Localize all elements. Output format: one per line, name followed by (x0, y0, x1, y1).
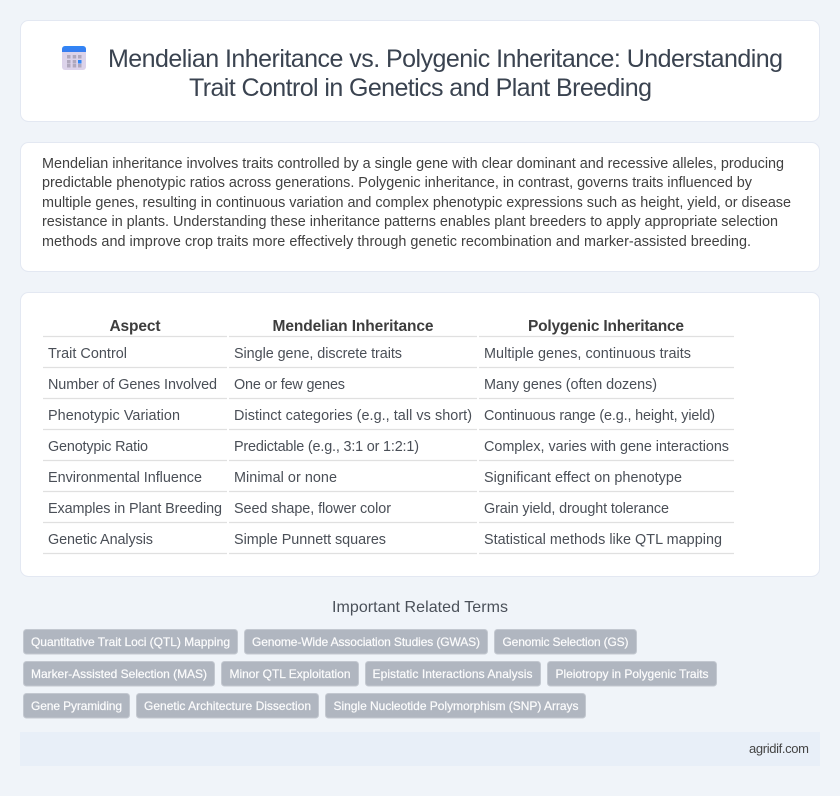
panel: introduction (20, 142, 820, 272)
tag: epistatic (366, 662, 540, 686)
title: Mendelian Inheritance vs. Polygenic Inheritance: Understanding (108, 45, 783, 73)
text block: introduction paragraph: methods and improve crop traits more effectively through genetic recombination and marker-assisted breeding. (42, 234, 751, 250)
table row: genotypic ratio: Genotypic Ratio (48, 439, 148, 455)
footer (20, 732, 820, 766)
table row: examples in plant breeding: Grain yield, drought tolerance (484, 501, 669, 517)
table row: genetic analysis: Genetic Analysis (48, 532, 153, 548)
table header row (110, 318, 684, 335)
table row: examples in plant breeding (48, 501, 669, 517)
table row: number of genes: Number of Genes Involved (48, 377, 217, 393)
tag: genetic architecture: Genetic Architecture Dissection (144, 699, 311, 713)
tag: SNP arrays (326, 694, 586, 718)
panel: comparison table (20, 292, 820, 576)
text block: introduction paragraph: predictable phenotypic ratios across generations. Polygenic inheritance, in contrast, governs traits influenced by (42, 175, 753, 191)
tag: genomic selection (494, 630, 636, 654)
table row: number of genes: Many genes (often dozens) (484, 377, 657, 393)
footer: agridif.com (749, 741, 809, 756)
table header row: Aspect (110, 318, 160, 335)
tag: pleiotropy: Pleiotropy in Polygenic Traits (556, 667, 708, 681)
table row: trait control: Single gene, discrete traits (234, 346, 402, 362)
icon: calendar grid (62, 46, 86, 70)
table header row: Polygenic Inheritance (528, 318, 684, 335)
tag: QTL mapping (24, 630, 238, 654)
tag: GWAS (244, 630, 488, 654)
table row: genetic analysis: Simple Punnett squares (234, 532, 386, 548)
tag: gene pyramiding: Gene Pyramiding (31, 699, 122, 713)
text block: introduction paragraph (42, 156, 791, 250)
table row: number of genes: One or few genes (234, 377, 345, 393)
tag: minor QTL (222, 662, 358, 686)
table row: genotypic ratio: Predictable (e.g., 3:1 or 1:2:1) (234, 439, 419, 455)
tag: QTL mapping: Quantitative Trait Loci (QTL) Mapping (31, 635, 230, 649)
table row: trait control (48, 346, 691, 362)
table row: examples in plant breeding: Examples in Plant Breeding (48, 501, 222, 517)
tag: MAS (24, 662, 214, 686)
tag: epistatic: Epistatic Interactions Analysis (372, 667, 532, 681)
table row: number of genes (48, 377, 657, 393)
table row: genotypic ratio: Complex, varies with gene interactions (484, 439, 729, 455)
tag: genetic architecture (136, 694, 318, 718)
table row: phenotypic variation (48, 408, 715, 424)
panel: header (20, 20, 820, 122)
tag: GWAS: Genome-Wide Association Studies (GWAS) (252, 635, 480, 649)
table header row: Mendelian Inheritance (272, 318, 434, 335)
tag: pleiotropy (548, 662, 716, 686)
heading: important related terms: Important Related Terms (332, 599, 508, 616)
title (108, 45, 783, 102)
text block: introduction paragraph: Mendelian inheritance involves traits controlled by a single gene with clear dominant and recessive alleles, producing (42, 156, 784, 172)
text block: introduction paragraph: resistance in plants. Understanding these inheritance patterns enables plant breeders to apply appropriate selection (42, 214, 778, 230)
tag: gene pyramiding (24, 694, 130, 718)
table row: genetic analysis: Statistical methods like QTL mapping (484, 532, 722, 548)
tag list: related terms (24, 630, 716, 718)
table row: environmental influence: Environmental Influence (48, 470, 202, 486)
table row: phenotypic variation: Phenotypic Variation (48, 408, 180, 424)
tag: minor QTL: Minor QTL Exploitation (230, 667, 350, 681)
table row: genetic analysis (48, 532, 722, 548)
table row: examples in plant breeding: Seed shape, flower color (234, 501, 391, 517)
table row: environmental influence: Significant effect on phenotype (484, 470, 682, 486)
tag: MAS: Marker-Assisted Selection (MAS) (31, 667, 207, 681)
table row: trait control: Trait Control (48, 346, 127, 362)
table grid lines (43, 336, 734, 554)
table row: trait control: Multiple genes, continuous traits (484, 346, 691, 362)
table row: environmental influence: Minimal or none (234, 470, 337, 486)
title: Trait Control in Genetics and Plant Breeding (189, 74, 652, 102)
table row: phenotypic variation: Distinct categories (e.g., tall vs short) (234, 408, 472, 424)
table row: environmental influence (48, 470, 682, 486)
tag: SNP arrays: Single Nucleotide Polymorphism (SNP) Arrays (334, 699, 578, 713)
tag: genomic selection: Genomic Selection (GS) (502, 635, 628, 649)
table row: genotypic ratio (48, 439, 729, 455)
text block: introduction paragraph: multiple genes, resulting in continuous variation and complex phenotypic expressions such as height, yield, or disease (42, 195, 791, 211)
table row: phenotypic variation: Continuous range (e.g., height, yield) (484, 408, 715, 424)
